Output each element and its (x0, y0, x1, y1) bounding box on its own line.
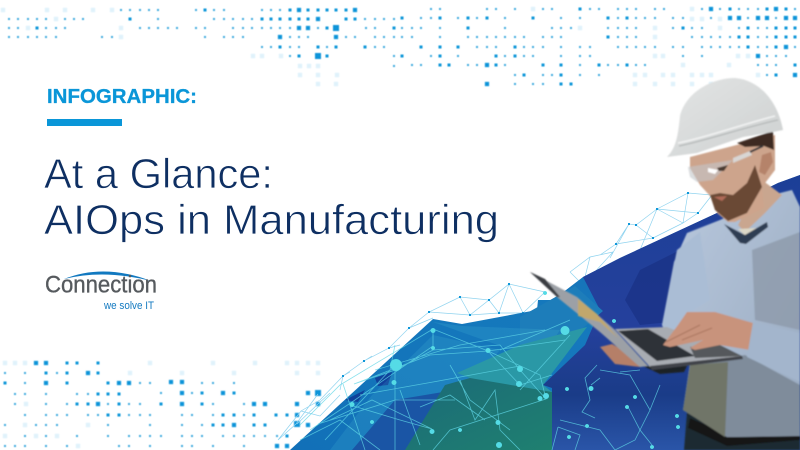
dot pattern: top (3, 9, 795, 84)
deep blue area (543, 175, 800, 450)
darker patches in left mass (345, 372, 470, 450)
accent bar (47, 119, 122, 126)
safety glasses (688, 160, 733, 182)
hat ridge (678, 116, 775, 143)
hard hat (667, 78, 783, 157)
base shape (290, 175, 800, 450)
trousers and belt (684, 412, 800, 450)
shirt body (662, 190, 800, 437)
inner network lines (300, 320, 660, 450)
cyan translucent facets (330, 322, 560, 450)
title: AIOps in Manufacturing (44, 196, 499, 243)
neck (738, 180, 782, 232)
person: engineer with hard hat and laptop (530, 78, 800, 450)
face (690, 135, 775, 222)
shirt lower shadow (683, 355, 800, 437)
beard (710, 165, 762, 221)
inner nodes (350, 291, 680, 449)
finger creases (666, 325, 712, 342)
heading label: INFOGRAPHIC: INFOGRAPHIC: (47, 85, 197, 108)
logo: Connection we solve IT: Connection (45, 272, 157, 298)
laptop screen (530, 272, 648, 367)
keyboard (618, 329, 695, 361)
hair (737, 131, 774, 150)
left hand (600, 344, 643, 367)
abstract blue polygon mass (290, 175, 800, 450)
title (44, 150, 499, 243)
laptop gold reflection (578, 299, 618, 338)
network lines above the mass (278, 192, 712, 440)
undershirt and placket (738, 228, 757, 238)
green block (405, 378, 552, 450)
laptop edge (650, 356, 743, 370)
shirt left sleeve (662, 232, 710, 345)
right hand (663, 312, 753, 350)
dark navy upper patch (625, 245, 690, 325)
shirt cuff (747, 322, 800, 382)
laptop base (615, 327, 742, 367)
shirt fold shadow (752, 232, 800, 330)
logo: Connection we solve IT (45, 271, 157, 312)
teal region (457, 327, 587, 400)
light blue band (520, 286, 603, 350)
lips (714, 196, 727, 201)
ear (759, 152, 773, 175)
laptop reflective deck (690, 345, 742, 358)
dot pattern: bottom (5, 363, 318, 446)
logo: Connection we solve IT: we solve IT (103, 300, 154, 312)
title: At a Glance: (44, 150, 273, 197)
forearm under laptop (643, 366, 687, 374)
